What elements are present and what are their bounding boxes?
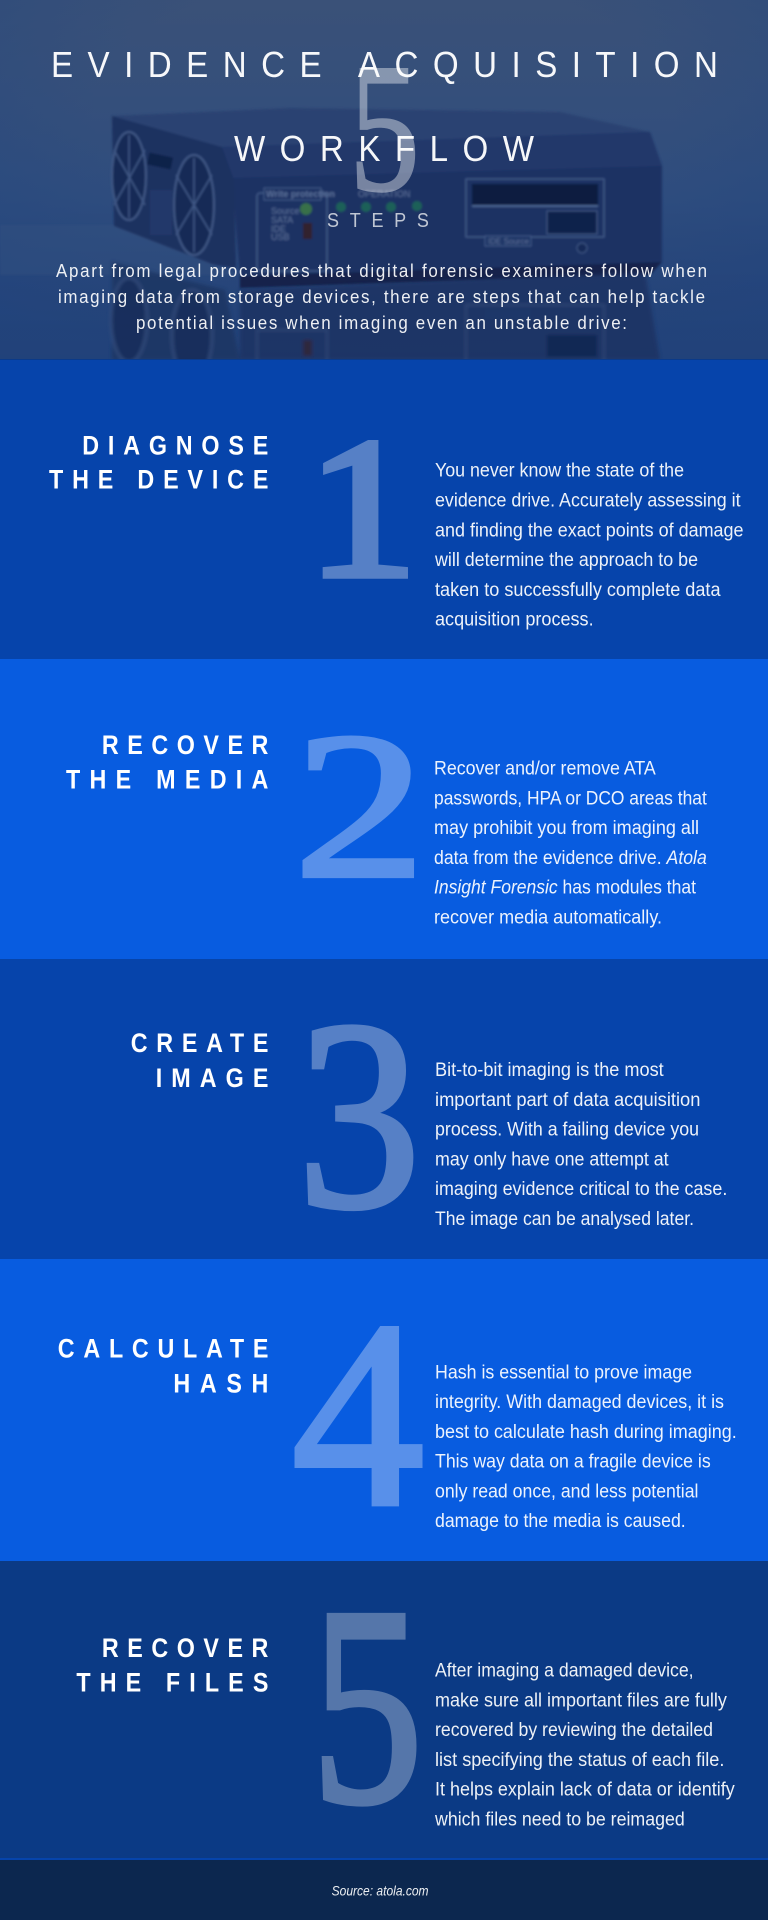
body text: step 2: passwords, HPA or DCO areas that xyxy=(434,788,707,810)
body text: step 1: You never know the state of the xyxy=(435,461,684,482)
panel: step 5 recover the files xyxy=(0,1550,768,1863)
heading: step 4 xyxy=(58,1334,268,1399)
subtitle: steps: STEPS xyxy=(327,210,429,232)
heading: step 3 xyxy=(131,1029,268,1093)
heading: step 2: THE MEDIA xyxy=(66,765,268,795)
body text: step 4 xyxy=(435,1362,737,1532)
heading: step 2 xyxy=(66,731,268,795)
numeral 1: 1 xyxy=(307,397,417,619)
image: forensic imaging device: Write protection xyxy=(266,189,335,199)
panel: step 1 diagnose the device xyxy=(0,359,768,660)
body text: step 5: list specifying the status of each file. xyxy=(435,1750,724,1771)
heading: step 2: RECOVER xyxy=(102,731,268,760)
body text: step 1: taken to successfully complete data xyxy=(435,580,721,601)
image: forensic imaging device: USB xyxy=(271,232,290,242)
body text: step 3: process. With a failing device you xyxy=(435,1120,699,1140)
heading: step 5 xyxy=(76,1634,268,1698)
body text: step 5: which files need to be reimaged xyxy=(434,1810,685,1830)
heading: step 3: CREATE xyxy=(131,1029,268,1058)
heading: step 1: THE DEVICE xyxy=(49,465,268,495)
body text: step 5: make sure all important files are fully xyxy=(435,1690,727,1712)
body text: step 2: data from the evidence drive. Atola xyxy=(434,848,707,869)
body text: step 1: evidence drive. Accurately assessing it xyxy=(435,490,741,512)
body text: step 2: Recover and/or remove ATA xyxy=(434,759,656,780)
heading: step 4: HASH xyxy=(173,1369,268,1399)
image: forensic imaging device: IDE Source xyxy=(488,237,529,246)
panel: footer xyxy=(0,1858,768,1920)
intro text: potential issues when imaging even an unstable drive: xyxy=(136,312,627,333)
body text: step 3: The image can be analysed later. xyxy=(435,1209,694,1230)
title: EVIDENCE ACQUISITION xyxy=(51,46,718,85)
body text: step 2: Insight Forensic has modules that xyxy=(434,878,697,899)
numeral 4: 4 xyxy=(292,1268,424,1562)
intro text: imaging data from storage devices, there are steps that can help tackle xyxy=(58,286,705,307)
numeral 3: 3 xyxy=(298,965,421,1264)
body text: step 5: It helps explain lack of data or identify xyxy=(435,1780,735,1801)
body text: step 4: only read once, and less potential xyxy=(435,1481,698,1502)
body text: step 3 xyxy=(435,1060,727,1230)
body text: step 4: integrity. With damaged devices, it is xyxy=(435,1392,724,1413)
body text: step 3: may only have one attempt at xyxy=(435,1149,669,1170)
body text: step 4: This way data on a fragile device is xyxy=(435,1452,711,1472)
title xyxy=(51,46,718,169)
heading: step 4: CALCULATE xyxy=(58,1334,268,1364)
body text: step 5: After imaging a damaged device, xyxy=(435,1661,694,1682)
big numeral 5: 5 xyxy=(349,25,420,230)
numeral 5: 5 xyxy=(311,1550,423,1863)
intro text: Apart from legal procedures that digital forensic examiners follow when xyxy=(56,260,707,281)
body text: step 1: will determine the approach to be xyxy=(434,550,698,571)
body text: step 3: important part of data acquisition xyxy=(435,1090,700,1111)
panel: step 2 recover the media xyxy=(0,659,768,960)
body text: step 5: recovered by reviewing the detailed xyxy=(435,1720,713,1741)
intro text xyxy=(56,260,707,333)
heading: step 5: RECOVER xyxy=(102,1634,268,1663)
image: forensic imaging device: OPERATION xyxy=(358,189,410,199)
body text: step 5 xyxy=(434,1661,735,1830)
image: forensic imaging device: Source xyxy=(271,206,300,216)
heading: step 5: THE FILES xyxy=(76,1668,268,1698)
image: forensic imaging device: IDE xyxy=(271,224,286,234)
body text: step 1 xyxy=(434,461,744,631)
body text: step 3: Bit-to-bit imaging is the most xyxy=(435,1060,664,1081)
heading: step 1: DIAGNOSE xyxy=(82,431,268,461)
body text: step 2: may prohibit you from imaging all xyxy=(434,818,699,839)
panel: step 4 calculate hash xyxy=(0,1259,768,1562)
title: WORKFLOW xyxy=(234,130,534,169)
panel: hero header xyxy=(0,0,768,380)
image: forensic imaging device: SATA xyxy=(271,215,293,225)
panel: step 3 create image xyxy=(0,959,768,1264)
body text: step 1: acquisition process. xyxy=(435,610,594,631)
body text: step 1: and finding the exact points of damage xyxy=(435,520,744,541)
heading: step 3: IMAGE xyxy=(156,1064,268,1093)
body text: step 4: Hash is essential to prove image xyxy=(435,1362,692,1383)
numeral 2: 2 xyxy=(294,689,426,922)
source text: Source: atola.com xyxy=(332,1883,429,1899)
body text: step 4: damage to the media is caused. xyxy=(435,1511,686,1532)
body text: step 4: best to calculate hash during imaging. xyxy=(435,1422,737,1443)
body text: step 3: imaging evidence critical to the case. xyxy=(435,1179,727,1200)
image: forensic imaging device xyxy=(0,108,662,288)
heading: step 1 xyxy=(49,431,268,495)
body text: step 2 xyxy=(434,759,707,928)
image: device reflection xyxy=(111,262,660,380)
body text: step 2: recover media automatically. xyxy=(434,908,662,928)
